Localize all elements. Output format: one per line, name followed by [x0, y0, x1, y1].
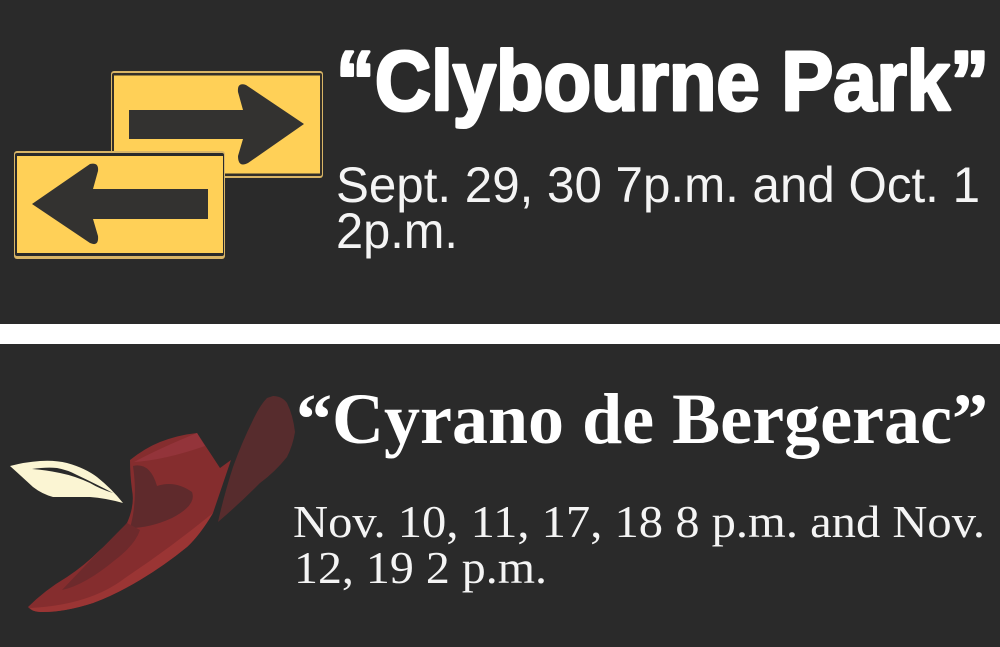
panel: Cyrano de Bergerac	[10, 379, 988, 612]
text: Cyrano dates: Nov. 10, 11, 17, 18 8 p.m. and Nov.	[293, 496, 985, 547]
heading: Cyrano de Bergerac: “Cyrano de Bergerac”	[296, 379, 988, 459]
plume	[218, 396, 295, 522]
text: Clybourne Park dates: 2p.m.	[336, 203, 458, 259]
text: Cyrano dates	[293, 496, 985, 593]
icon: left arrow road sign	[14, 151, 225, 259]
text: Clybourne Park dates	[336, 157, 980, 259]
text: Cyrano dates: 12, 19 2 p.m.	[294, 542, 547, 593]
icon: feather	[10, 461, 123, 503]
icon: red plumed hat	[28, 396, 295, 612]
icon: right arrow road sign	[111, 71, 323, 178]
panel: Clybourne Park	[14, 34, 989, 259]
text: Clybourne Park dates: Sept. 29, 30 7p.m. and Oct. 1	[336, 157, 980, 213]
